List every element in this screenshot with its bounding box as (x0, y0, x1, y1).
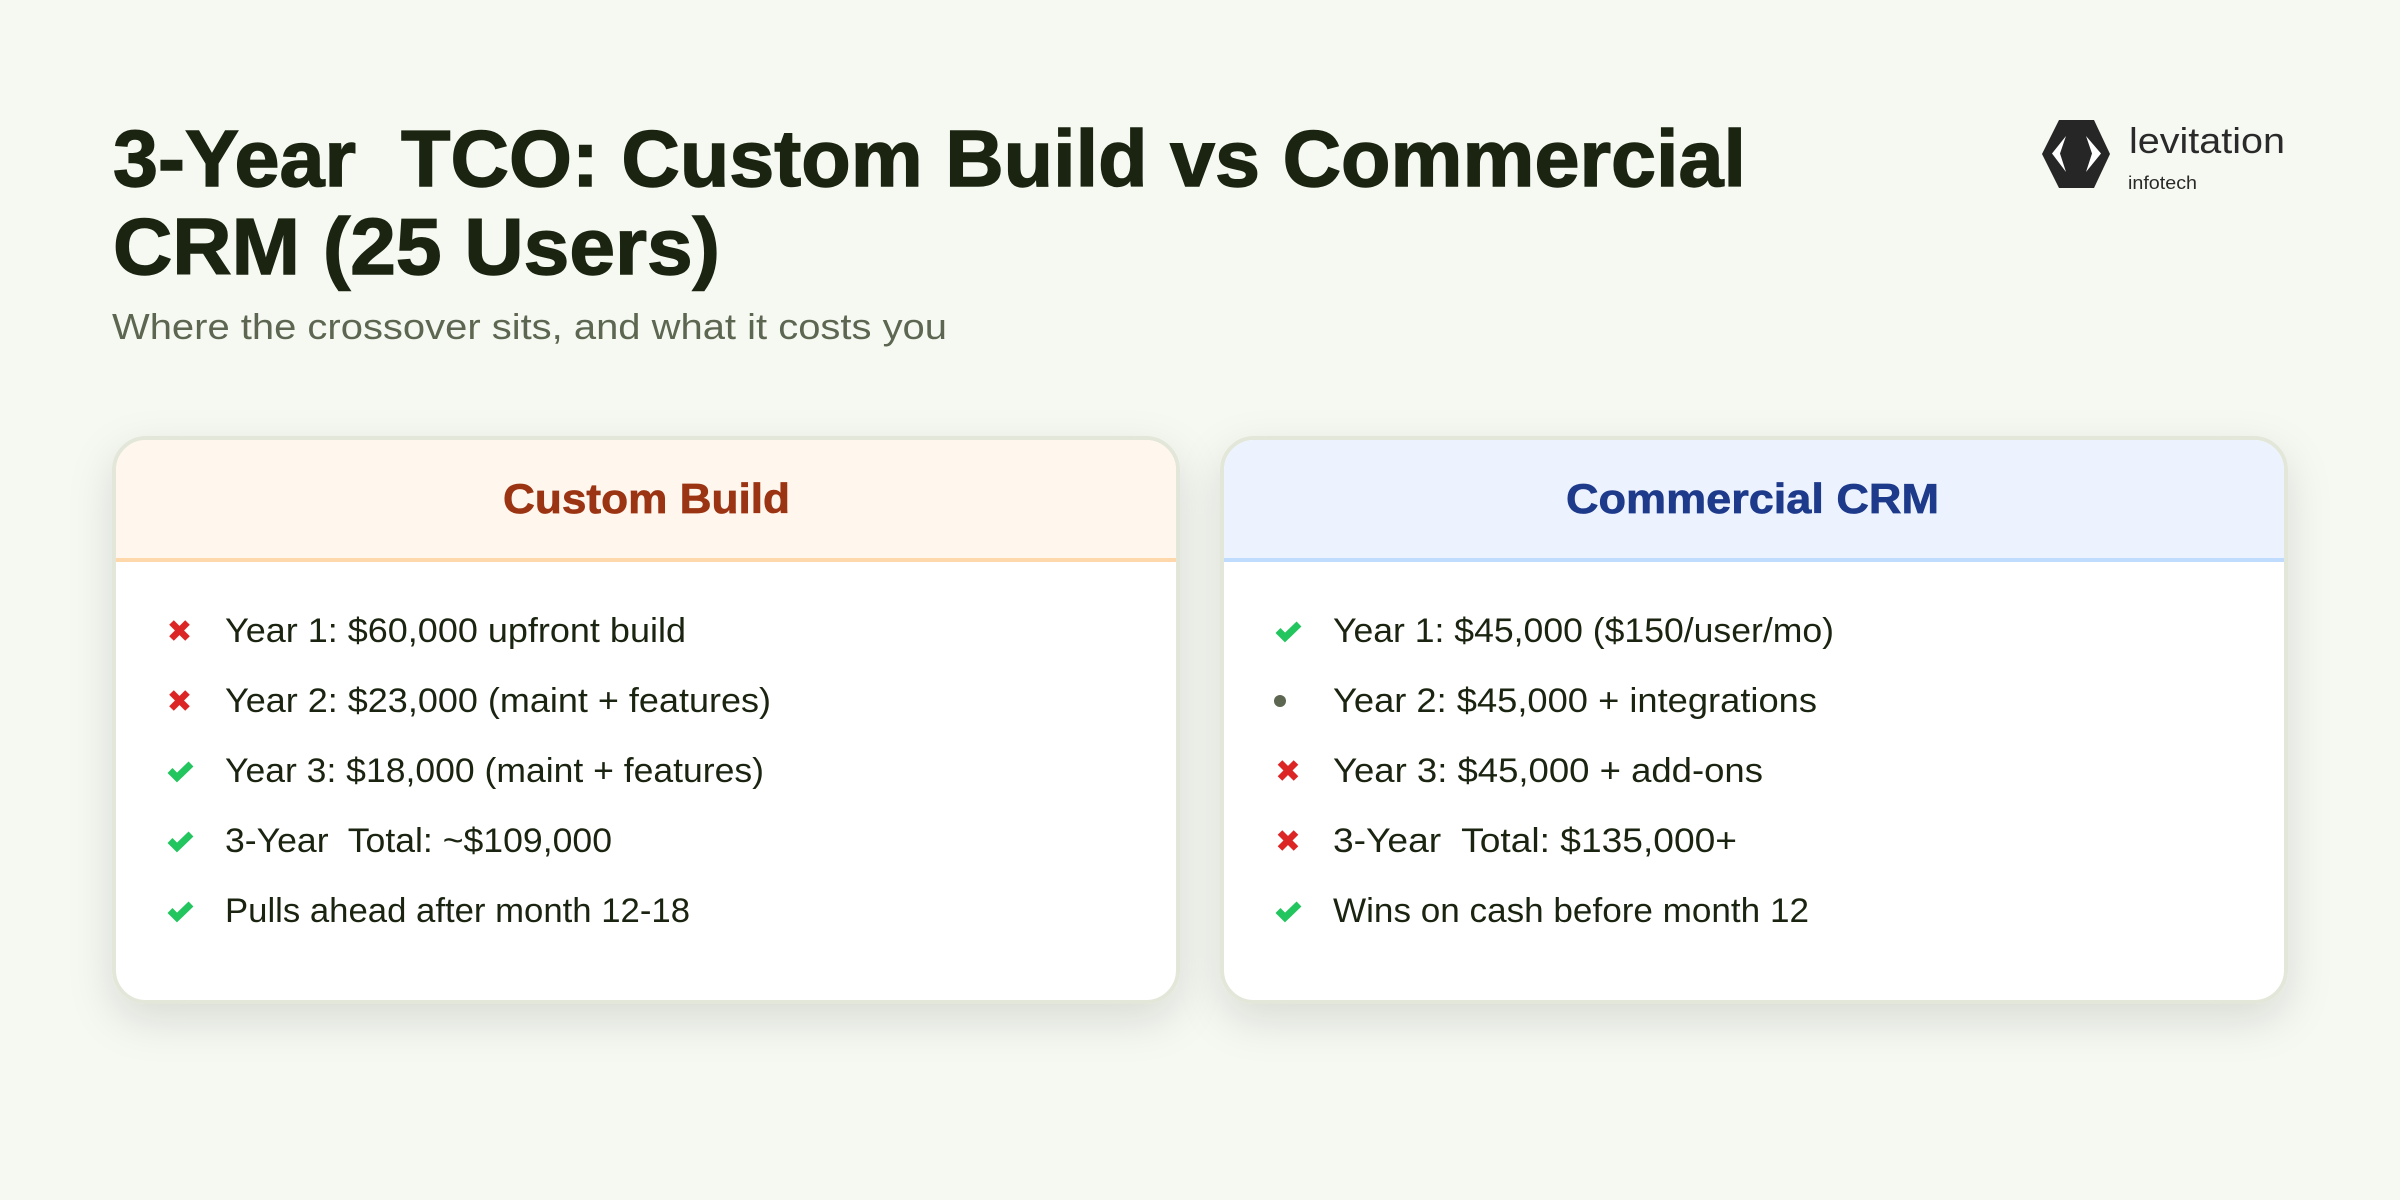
row: crossover: Pulls ahead after month 12-18 (225, 892, 690, 930)
row: total: 3-Year Total: $135,000+ (1333, 822, 1737, 860)
icon: hexagon code mark (2042, 120, 2110, 188)
row: crossover: Wins on cash before month 12 (1333, 892, 1809, 930)
panel: custom build (114, 438, 1178, 1002)
heading: custom build: Custom Build (503, 475, 790, 522)
row: year 3: Year 3: $18,000 (maint + features) (225, 752, 764, 790)
row: year 2: Year 2: $45,000 + integrations (1333, 682, 1817, 720)
panel header: commercial crm (1224, 440, 2284, 562)
heading: commercial crm: Commercial CRM (1566, 475, 1939, 522)
panel: commercial crm (1222, 438, 2286, 1002)
logo tagline: infotech (2128, 173, 2197, 193)
logo: levitation infotech (2042, 120, 2285, 193)
title: CRM (25 Users) (113, 202, 720, 291)
subtitle: Where the crossover sits, and what it costs you (112, 306, 947, 347)
title (113, 114, 1746, 291)
row: year 1: Year 1: $60,000 upfront build (225, 612, 686, 650)
row: year 2: Year 2: $23,000 (maint + features) (225, 682, 771, 720)
title: 3-Year TCO: Custom Build vs Commercial (113, 114, 1746, 203)
panel header: custom build (116, 440, 1176, 562)
row: year 3: Year 3: $45,000 + add-ons (1333, 752, 1763, 790)
row: total: 3-Year Total: ~$109,000 (225, 822, 612, 860)
logo wordmark: levitation (2129, 120, 2285, 161)
row: year 1: Year 1: $45,000 ($150/user/mo) (1333, 612, 1834, 650)
